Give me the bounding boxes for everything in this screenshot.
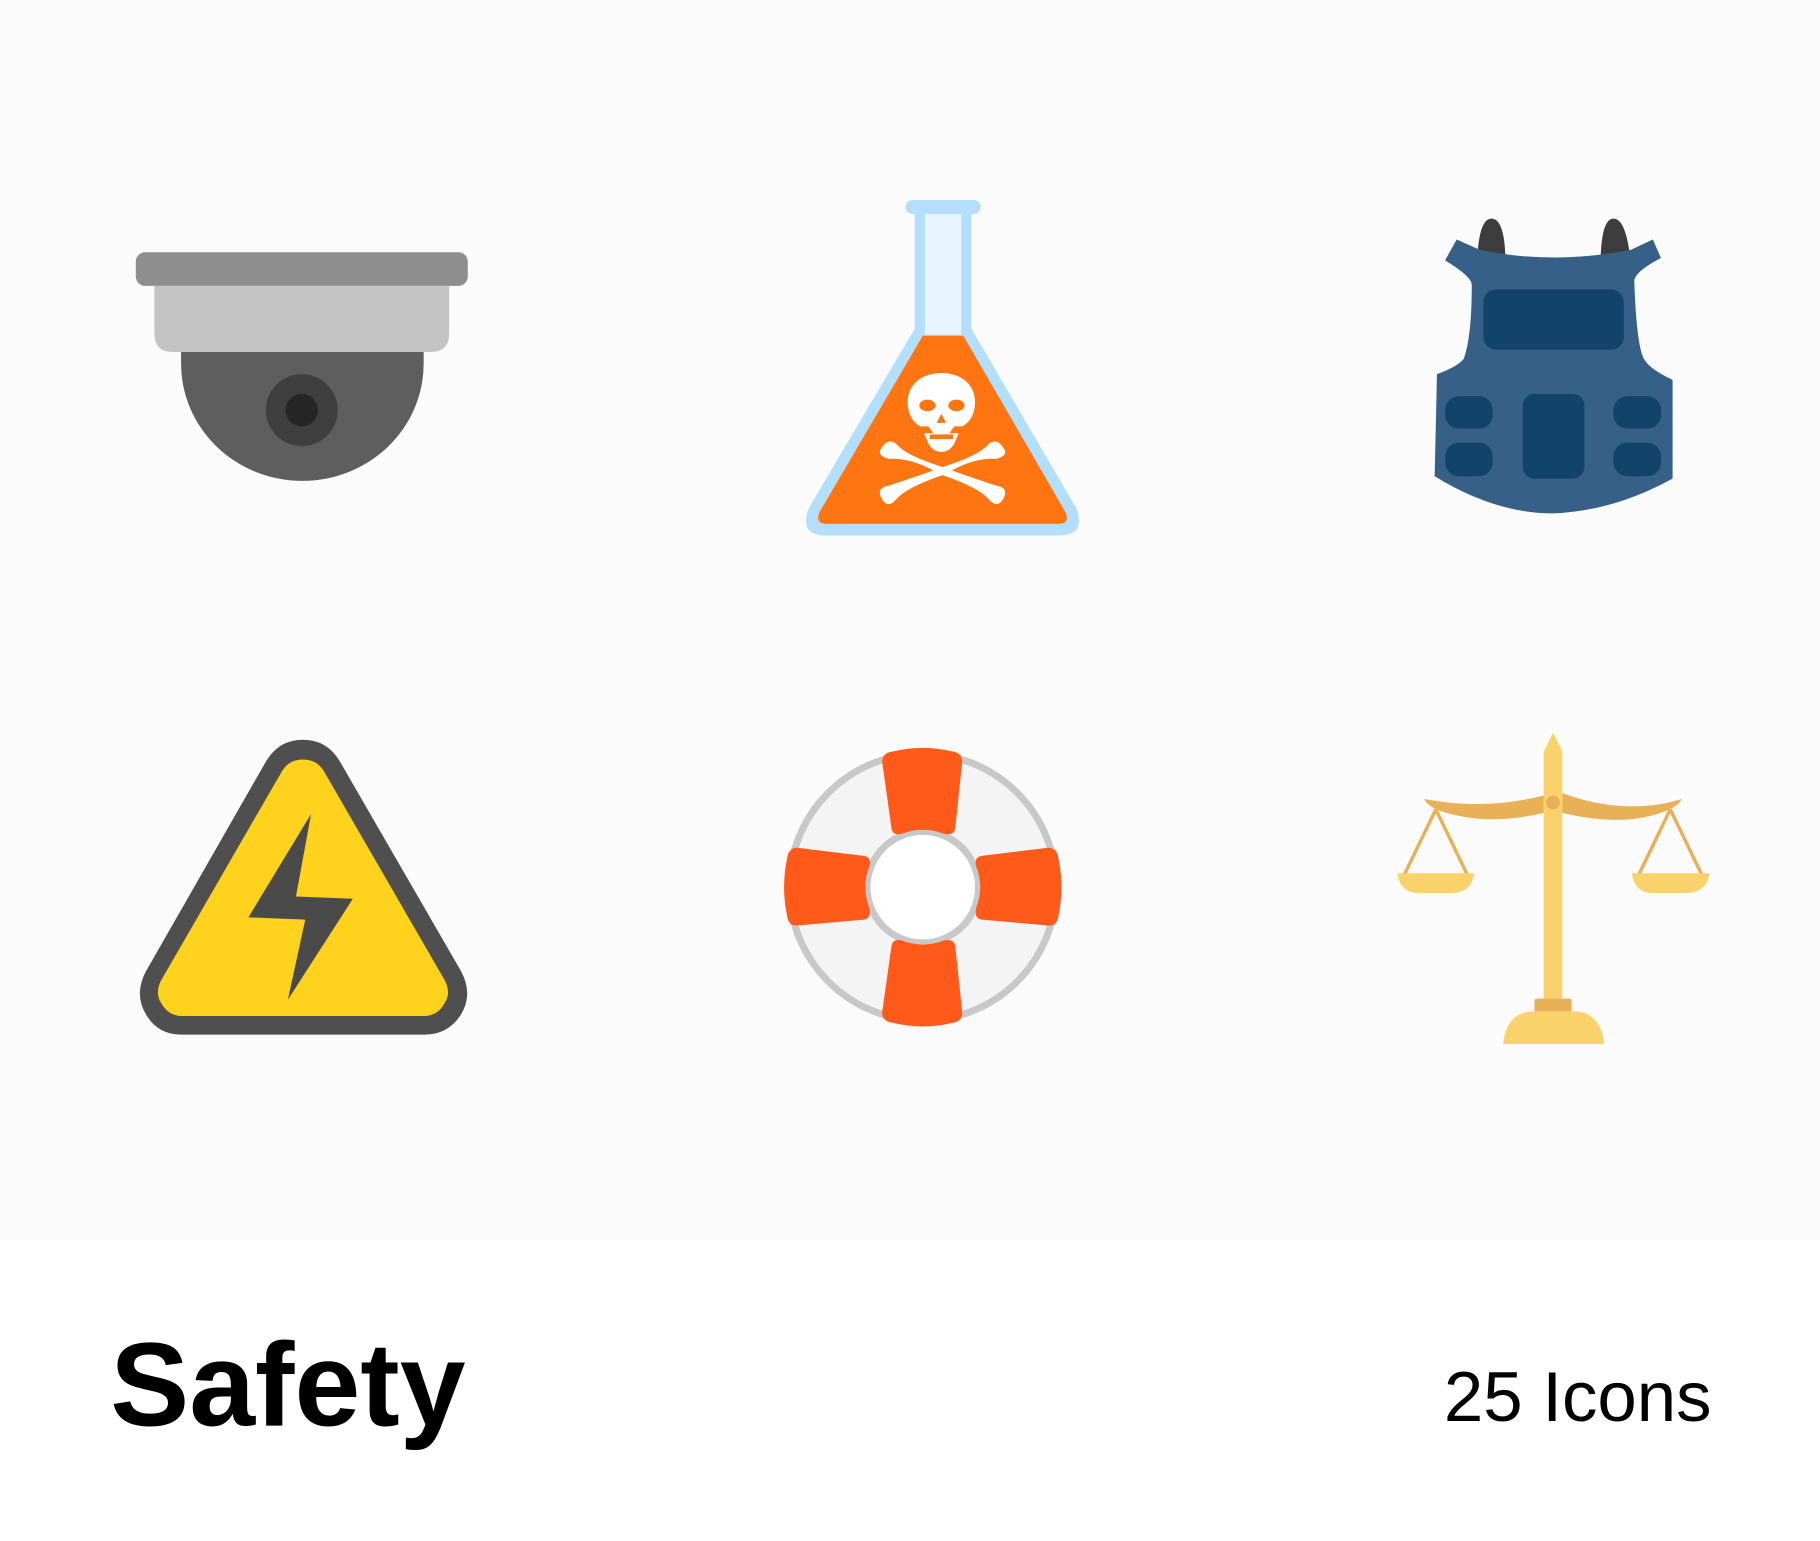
icon: high voltage warning	[140, 740, 467, 1035]
icon: poison flask	[806, 200, 1079, 535]
icon count: 25 Icons	[1444, 1358, 1712, 1437]
icon: bulletproof vest	[1435, 219, 1673, 513]
skull and crossbones	[880, 373, 1005, 504]
icon: security camera	[136, 252, 468, 481]
icon: scales of justice	[1398, 733, 1710, 1044]
icon: lifebuoy	[784, 748, 1061, 1026]
title: Safety	[110, 1320, 466, 1452]
